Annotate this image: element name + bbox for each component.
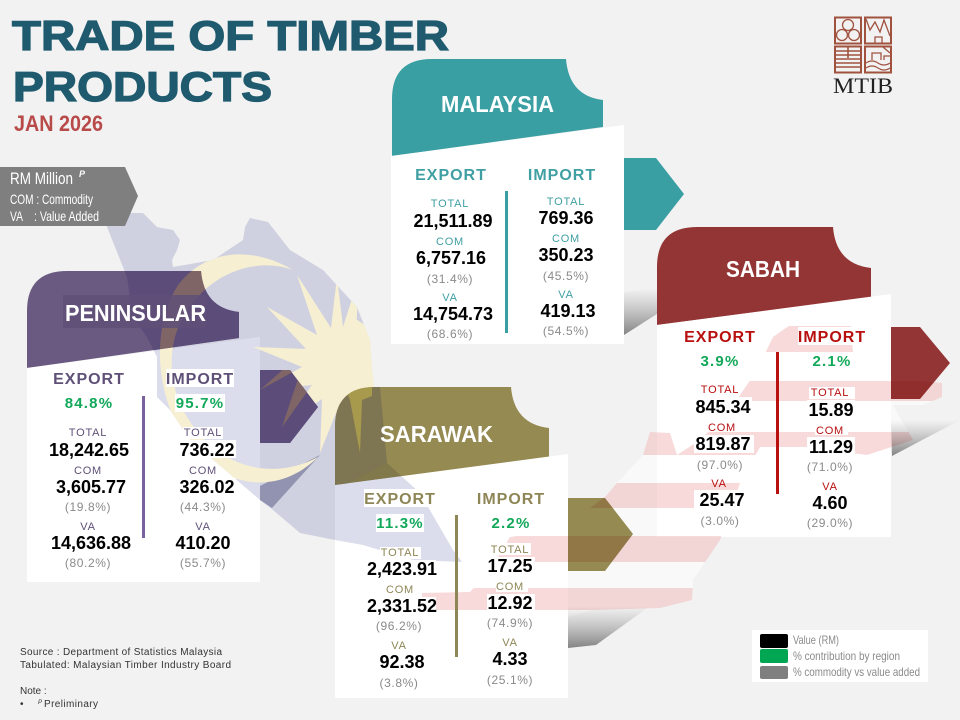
source note: • [20, 699, 24, 710]
figures: Malaysia export [413, 167, 493, 341]
figures: Sarawak export: 92.38 [379, 652, 425, 672]
legend: % commodity vs value added [793, 665, 920, 679]
figures: Peninsular import: IMPORT [166, 371, 234, 388]
MTIB logo: MTIB [833, 73, 893, 98]
figures: Peninsular import: VA [195, 521, 211, 533]
source note: Note : [20, 686, 47, 697]
figures: Sarawak export: TOTAL [381, 547, 419, 559]
figures: Sarawak export [364, 491, 437, 690]
figures: Peninsular import: TOTAL [184, 427, 222, 439]
figures: Sarawak export: 2,423.91 [367, 559, 437, 579]
figures: Sarawak export: VA [391, 640, 407, 652]
unit key arrow: RM Million [10, 169, 73, 188]
figures: Peninsular export: (19.8%) [65, 500, 111, 514]
map: East Malaysia land [422, 300, 942, 640]
figures: Sabah export: 845.34 [695, 397, 751, 417]
figures: Sabah export: TOTAL [701, 384, 739, 396]
figures: Sarawak import: 2.2% [492, 515, 530, 532]
figures: Sabah export: 3.9% [700, 353, 740, 370]
figures: Sarawak export: 11.3% [376, 515, 424, 532]
figures: Peninsular import: 410.20 [175, 533, 231, 553]
figures: Malaysia export: (31.4%) [427, 272, 473, 286]
figures: Malaysia import: IMPORT [528, 167, 596, 184]
figures: Sabah import: 4.60 [812, 493, 848, 513]
figures: Malaysia export: TOTAL [431, 198, 469, 210]
figures: Sabah export: VA [711, 478, 727, 490]
figures: Sabah import: 15.89 [808, 400, 854, 420]
figures: Malaysia import: COM [552, 233, 580, 245]
divider: Peninsular [142, 396, 145, 538]
source note [20, 647, 231, 710]
figures: Sabah import: VA [822, 481, 838, 493]
figures: Peninsular import: 736.22 [179, 440, 235, 460]
figures: Malaysia import: 769.36 [538, 208, 594, 228]
title: PRODUCTS [13, 63, 272, 110]
figures: Malaysia export: 6,757.16 [416, 248, 486, 268]
figures: Sabah import: IMPORT [798, 329, 866, 346]
figures: Sabah import: 2.1% [812, 353, 852, 370]
legend [752, 630, 928, 682]
figures: Sarawak import: 12.92 [487, 593, 533, 613]
date: JAN 2026 [14, 111, 103, 136]
source note: Source : Department of Statistics Malaysia [20, 647, 222, 658]
map: crescent and star [160, 254, 374, 482]
figures: Peninsular export: 84.8% [65, 395, 113, 412]
figures: Sabah import: COM [816, 425, 844, 437]
heading: Peninsular: PENINSULAR [65, 300, 206, 326]
figures: Peninsular import: (55.7%) [180, 556, 226, 570]
figures: Sarawak import: 4.33 [492, 649, 528, 669]
figures: Peninsular export: VA [80, 521, 96, 533]
figures: Peninsular export: 3,605.77 [56, 477, 126, 497]
map: East Malaysia flag stripes [400, 326, 960, 610]
figures: Peninsular export: 14,636.88 [51, 533, 131, 553]
figures: Peninsular export: COM [74, 465, 102, 477]
figures: Malaysia export: VA [442, 292, 458, 304]
panel: Malaysia [391, 59, 684, 344]
heading: Malaysia: MALAYSIA [441, 91, 554, 117]
unit key arrow: VA [10, 208, 23, 224]
legend: % contribution by region [793, 649, 900, 663]
figures: Sarawak export: EXPORT [364, 491, 436, 508]
figures: Malaysia import: 350.23 [538, 245, 594, 265]
panel: Sarawak [335, 387, 633, 698]
figures: Sarawak import: TOTAL [491, 544, 529, 556]
figures: Peninsular export: TOTAL [69, 427, 107, 439]
figures: Sarawak export: (3.8%) [380, 676, 418, 690]
figures: Peninsular export: EXPORT [53, 371, 125, 388]
figures: Sarawak import: VA [502, 637, 518, 649]
map fold shadows [260, 288, 960, 648]
figures: Malaysia import [528, 167, 596, 338]
figures: Malaysia export: 14,754.73 [413, 304, 493, 324]
figures: Sabah import: TOTAL [811, 387, 849, 399]
figures: Malaysia import: VA [558, 289, 574, 301]
figures: Malaysia export: COM [436, 236, 464, 248]
figures: Sarawak import: IMPORT [477, 491, 545, 508]
figures: Peninsular import: (44.3%) [180, 500, 226, 514]
map: flag motif over Peninsular header and arrow [154, 271, 318, 443]
figures: Malaysia export: EXPORT [415, 167, 487, 184]
title: TRADE OF TIMBER [12, 12, 449, 59]
figures: Peninsular export: (80.2%) [65, 556, 111, 570]
figures: Sarawak export: COM [386, 584, 414, 596]
figures: Malaysia import: TOTAL [547, 196, 585, 208]
figures: Sarawak import: 17.25 [487, 556, 533, 576]
legend: Value (RM) [793, 633, 839, 647]
figures: Peninsular import: 95.7% [176, 395, 224, 412]
heading: Sabah: SABAH [726, 256, 800, 282]
panel: Peninsular [27, 271, 318, 582]
divider: Sabah [776, 352, 779, 494]
figures: Sarawak export: (96.2%) [376, 619, 422, 633]
unit key arrow [0, 167, 138, 226]
figures: Sabah import: (29.0%) [807, 516, 853, 530]
figures: Sarawak import: (25.1%) [487, 673, 533, 687]
panel: Sabah [657, 227, 950, 537]
figures: Sarawak import [477, 491, 545, 687]
figures: Sabah import: 11.29 [809, 437, 853, 457]
figures: Malaysia import: (54.5%) [543, 324, 589, 338]
figures: Sabah import: (71.0%) [807, 460, 853, 474]
unit key arrow: : Value Added [34, 208, 99, 224]
figures: Malaysia export: 21,511.89 [413, 211, 493, 231]
figures: Peninsular export [49, 371, 131, 570]
figures: Malaysia import: (45.5%) [543, 269, 589, 283]
text backing patches [166, 327, 866, 615]
divider: Malaysia [505, 191, 508, 333]
title [12, 12, 449, 110]
heading: Sarawak: SARAWAK [380, 421, 493, 447]
figures: Peninsular export: 18,242.65 [49, 440, 129, 460]
figures: Sabah export: EXPORT [684, 329, 756, 346]
figures: Peninsular import: COM [189, 465, 217, 477]
figures: Sarawak export: 2,331.52 [367, 596, 437, 616]
MTIB logo [833, 18, 893, 98]
figures: Sabah export: 25.47 [699, 490, 745, 510]
divider: Sarawak [455, 515, 458, 657]
figures: Sabah export: COM [708, 422, 736, 434]
figures: Sabah import [798, 329, 866, 530]
figures: Sabah export: 819.87 [695, 434, 751, 454]
source note: P [38, 700, 42, 706]
figures: Sarawak import: COM [496, 581, 524, 593]
figures: Malaysia export: (68.6%) [427, 327, 473, 341]
figures: Sarawak import: (74.9%) [487, 616, 533, 630]
figures: Sabah export: (3.0%) [701, 514, 739, 528]
figures: Sabah export [684, 329, 756, 528]
map: motif over Sarawak header [335, 387, 387, 490]
source note: Tabulated: Malaysian Timber Industry Board [20, 660, 231, 671]
map: Peninsular Malaysia [105, 207, 462, 562]
figures: Malaysia import: 419.13 [540, 301, 596, 321]
figures: Peninsular import: 326.02 [179, 477, 235, 497]
unit key arrow: P [79, 169, 86, 179]
unit key arrow: COM : Commodity [10, 191, 93, 207]
figures: Sabah export: (97.0%) [697, 458, 743, 472]
figures: Peninsular import [166, 371, 235, 570]
source note: Preliminary [44, 699, 98, 710]
